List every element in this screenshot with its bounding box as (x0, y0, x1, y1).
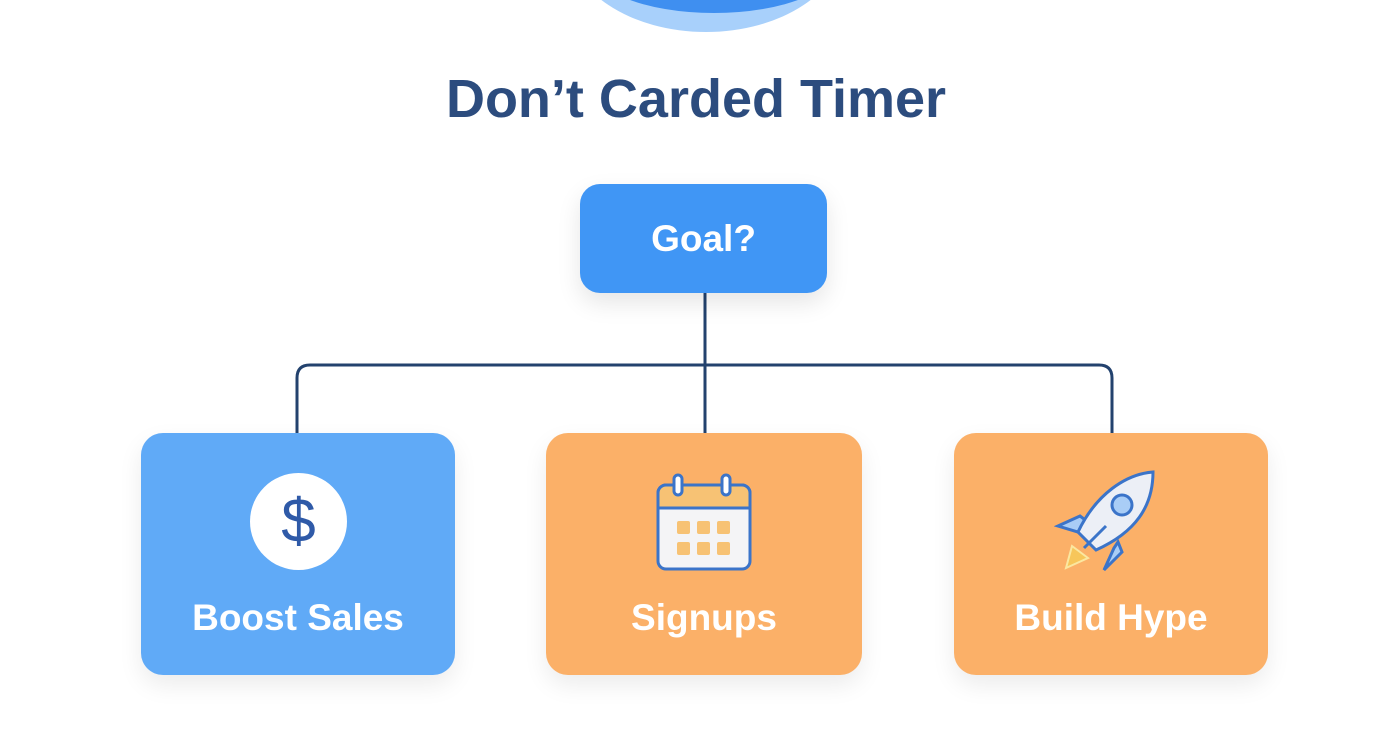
goal box: Goal? (651, 218, 756, 259)
panel: boost sales (141, 433, 455, 675)
decorative top circle (602, 0, 810, 32)
panel: build hype (954, 433, 1268, 675)
goal box (580, 184, 827, 293)
icon: dollar: $ (281, 487, 316, 556)
icon: dollar (250, 473, 347, 570)
panel: signups (546, 433, 862, 675)
icon: rocket (1054, 470, 1154, 571)
label: Build Hype (1014, 597, 1208, 638)
label: Boost Sales (192, 597, 404, 638)
icon: calendar (656, 474, 752, 570)
title: Don’t Carded Timer (446, 69, 946, 129)
label: Signups (631, 597, 777, 638)
